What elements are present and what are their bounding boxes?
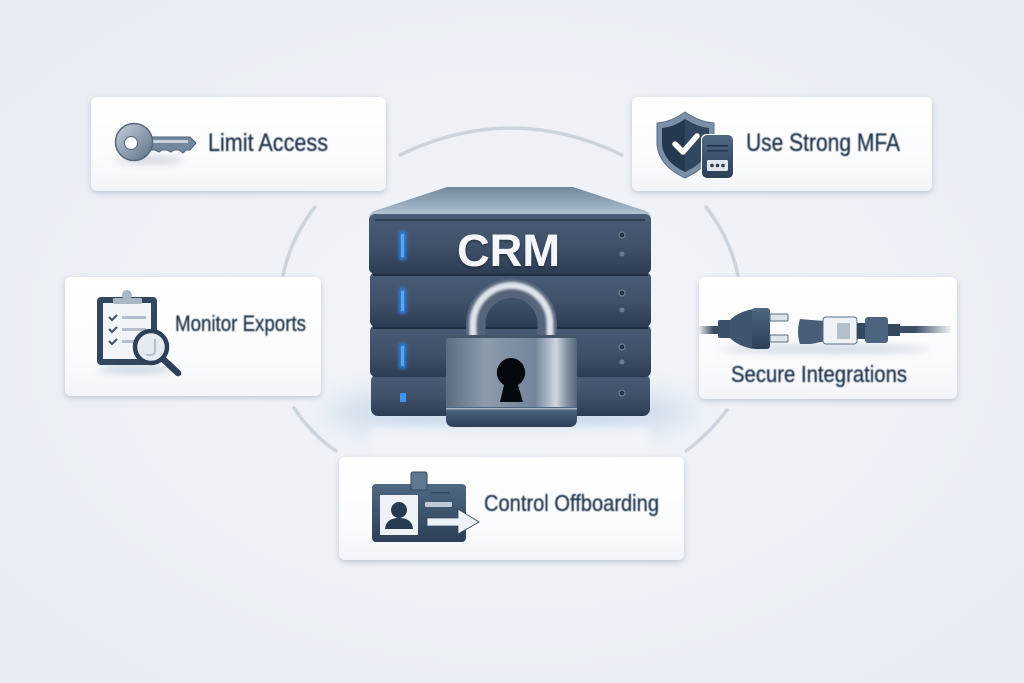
card: Secure Integrations — [699, 277, 957, 399]
CRM label: CRM — [457, 225, 560, 276]
connecting ring arcs — [283, 128, 738, 451]
icon: key — [116, 124, 196, 164]
card: Monitor Exports — [65, 277, 321, 396]
padlock — [446, 286, 577, 427]
server layer 2 — [370, 272, 651, 327]
server roof — [369, 187, 651, 222]
label: Limit Access — [208, 129, 328, 157]
label: Secure Integrations — [731, 361, 907, 387]
server layer 3 — [370, 325, 651, 377]
floor reflection — [370, 428, 650, 452]
label: Control Offboarding — [484, 490, 659, 516]
keyhole — [497, 358, 525, 402]
server floor glow — [325, 390, 695, 434]
icon: ID badge with arrow — [372, 472, 479, 542]
icon: plug and connector — [699, 308, 951, 353]
card: Limit Access — [91, 97, 386, 191]
icon: shield with device — [657, 112, 734, 179]
server layer 4 — [371, 374, 650, 416]
central CRM server with padlock — [325, 187, 695, 452]
icon: clipboard with magnifier — [97, 290, 178, 373]
server layer 1 — [369, 214, 651, 274]
card: Use Strong MFA — [632, 97, 932, 191]
label: Monitor Exports — [175, 311, 306, 336]
label: Use Strong MFA — [746, 129, 900, 157]
card: Control Offboarding — [339, 457, 684, 560]
